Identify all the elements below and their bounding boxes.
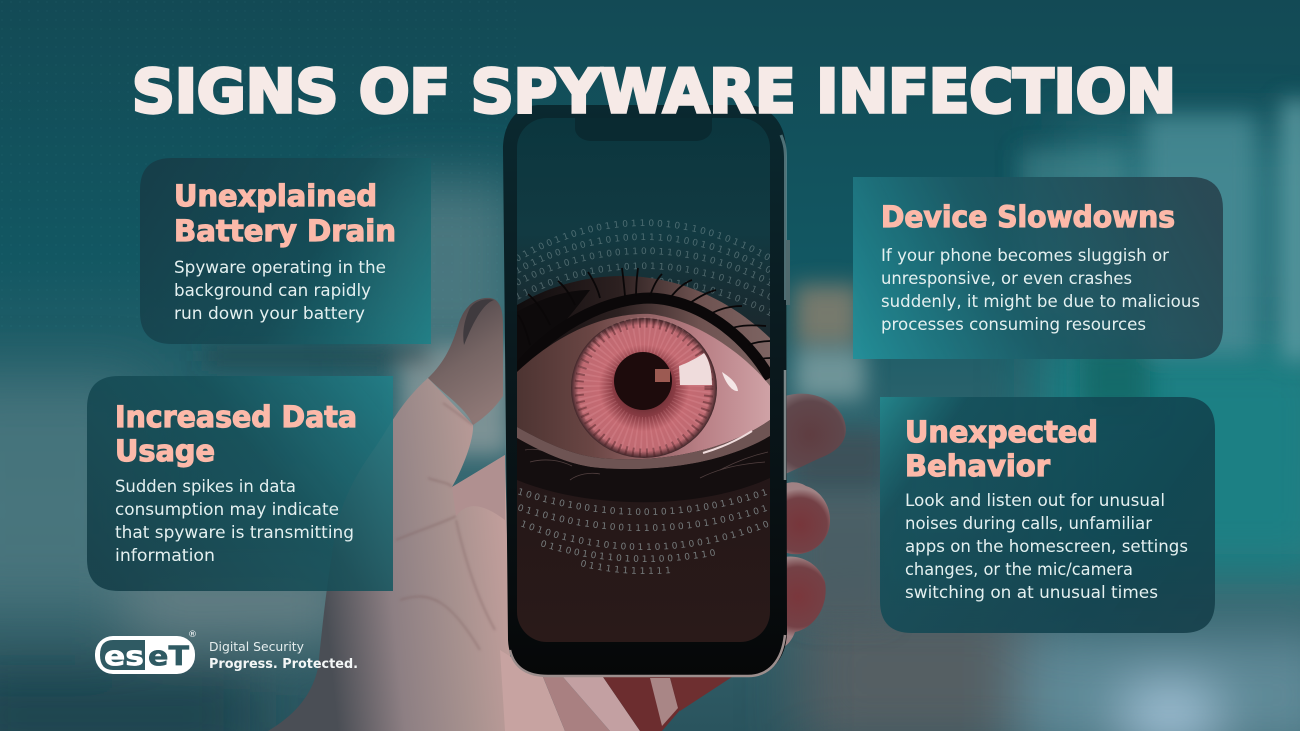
- panel background: [853, 177, 1223, 359]
- body text: If your phone becomes sluggish or: [881, 246, 1169, 265]
- body text: apps on the homescreen, settings: [905, 537, 1188, 556]
- wet line: [703, 431, 752, 453]
- logo: es: [104, 641, 144, 672]
- phone edge highlight: [781, 135, 786, 300]
- pupil: [614, 352, 672, 410]
- body text: suddenly, it might be due to malicious: [881, 292, 1200, 311]
- lower lashes: [517, 436, 770, 502]
- body text: Look and listen out for unusual: [905, 491, 1165, 510]
- side button: [786, 240, 790, 305]
- heading: Unexpected: [905, 415, 1098, 449]
- iris: [571, 318, 717, 458]
- iris fibres: [594, 335, 694, 435]
- finger pads beside the thumb: [452, 455, 505, 520]
- heading: Device Slowdowns: [881, 200, 1175, 234]
- panel: device slowdowns: [853, 177, 1223, 359]
- catchlight square: [655, 369, 670, 382]
- title: SIGNS OF SPYWARE INFECTION: [132, 57, 1176, 127]
- body text: that spyware is transmitting: [115, 523, 354, 542]
- phone body: [503, 105, 787, 676]
- heading: Battery Drain: [174, 214, 396, 248]
- lash mass, left: [538, 290, 590, 340]
- thumbnail: [463, 299, 494, 345]
- sclera: [517, 314, 770, 459]
- body text: information: [115, 546, 215, 565]
- slogan: Progress. Protected.: [209, 657, 358, 672]
- panel: increased data usage: [87, 376, 393, 591]
- body text: background can rapidly: [174, 281, 371, 300]
- logo: ®: [188, 630, 197, 640]
- panel: unexplained battery drain: [140, 158, 431, 344]
- binary digits below the eye: 0 1 1 0 0 1 0 1 1 0 1 0 1 1 0 0 1 0 1 1 0: [541, 540, 715, 562]
- logo: eT: [148, 641, 190, 672]
- finger: index: [785, 394, 846, 474]
- ESET logo and tagline: [95, 630, 358, 674]
- sclera highlight: [722, 372, 738, 391]
- tagline: Digital Security: [209, 640, 304, 654]
- screen: [517, 118, 770, 642]
- heading: Usage: [115, 434, 215, 468]
- body text: switching on at unusual times: [905, 583, 1158, 602]
- binary digits above the eye: [517, 219, 770, 316]
- body text: run down your battery: [174, 304, 365, 323]
- binary digits below the eye: 1 0 1 0 0 1 1 0 1 1 0 1 0 0 1 1 0 1 0 1 0 0 1 1 0 1 1 0 1 0 0 1 0 1: [521, 520, 768, 550]
- binary digits below the eye: 0 1 1 0 1 0 0 1 1 0 1 0 0 1 1 1 0 1 0 0 1 0 1 1 0 0 1 1 0 1 0 1 1 0 1 0: [518, 504, 768, 531]
- body text: noises during calls, unfamiliar: [905, 514, 1152, 533]
- hand holding the phone: [268, 298, 846, 731]
- thumb: [428, 298, 503, 425]
- body text: Spyware operating in the: [174, 258, 386, 277]
- phone: [503, 105, 790, 678]
- lower lid rim: [517, 420, 770, 469]
- knuckle and palm creases: [396, 403, 495, 650]
- binary digits below the eye: [518, 488, 768, 574]
- lower lash strands: [525, 449, 768, 480]
- logo: [95, 630, 197, 674]
- body text: processes consuming resources: [881, 315, 1146, 334]
- phone bottom edge: [510, 635, 785, 676]
- body text: consumption may indicate: [115, 500, 339, 519]
- upper eyelid: [517, 276, 770, 386]
- panel background: [140, 158, 431, 344]
- body text: changes, or the mic/camera: [905, 560, 1133, 579]
- panel: unexpected behavior: [880, 397, 1215, 633]
- binary digits above the eye: 1 1 0 1 0 1 1 0 0 1 0 1 1 0 1 0 1 1 0 0 1 0 1 1 0 1 0 0 1 1 0 1 1 0 1 0: [517, 262, 770, 300]
- panel background: [87, 376, 393, 591]
- palm and wrist: [268, 378, 512, 731]
- binary digits below the eye: 0 1 1 1 1 1 1 1 1 1 1: [581, 560, 670, 574]
- body text: unresponsive, or even crashes: [881, 269, 1132, 288]
- heading: Behavior: [905, 449, 1051, 483]
- heading: Unexplained: [174, 179, 377, 213]
- finger: ring: [780, 556, 826, 648]
- upper lashes: [518, 268, 772, 360]
- window reflection: [679, 353, 712, 385]
- folded fingers under the phone: [500, 650, 732, 731]
- lash base line: [517, 298, 770, 378]
- panel background: [880, 397, 1215, 633]
- binary digits above the eye: 0 1 1 0 0 1 1 0 1 0 0 1 1 0 1 1 0 0 1 0 1 1 0 0 1 0 1 1 0 1 0 0 1 1 0 0: [517, 219, 770, 261]
- notch: [575, 118, 712, 141]
- right silver edge: [784, 370, 786, 480]
- binary digits above the eye: 1 0 1 1 0 0 1 0 0 1 1 0 1 0 0 1 1 1 0 1 0 0 1 0 1 1 0 0 1 1 0 1 0 1 1 0: [517, 233, 770, 274]
- body text: Sudden spikes in data: [115, 477, 296, 496]
- binary digits above the eye: 0 0 1 1 0 1 0 0 1 1 0 1 0 1 1 0 1 0 0 1 1 0 1 0 1 1 0 1 0 0 1 0 1 1 0 1: [650, 278, 770, 316]
- finger: middle: [780, 482, 830, 554]
- binary digits above the eye: 0 1 0 0 1 1 0 1 1 0 1 0 0 1 1 0 0 1 1 0 1 0 1 0 1 0 0 1 1 0 1 0 0 1 0 1: [517, 247, 770, 286]
- heading: Increased Data: [115, 400, 357, 434]
- binary digits below the eye: 1 0 0 1 1 0 1 0 0 1 1 0 1 1 0 0 1 0 1 1 0 1 0 0 1 1 0 1 0 1 1 0 0 1 0 1: [518, 488, 768, 516]
